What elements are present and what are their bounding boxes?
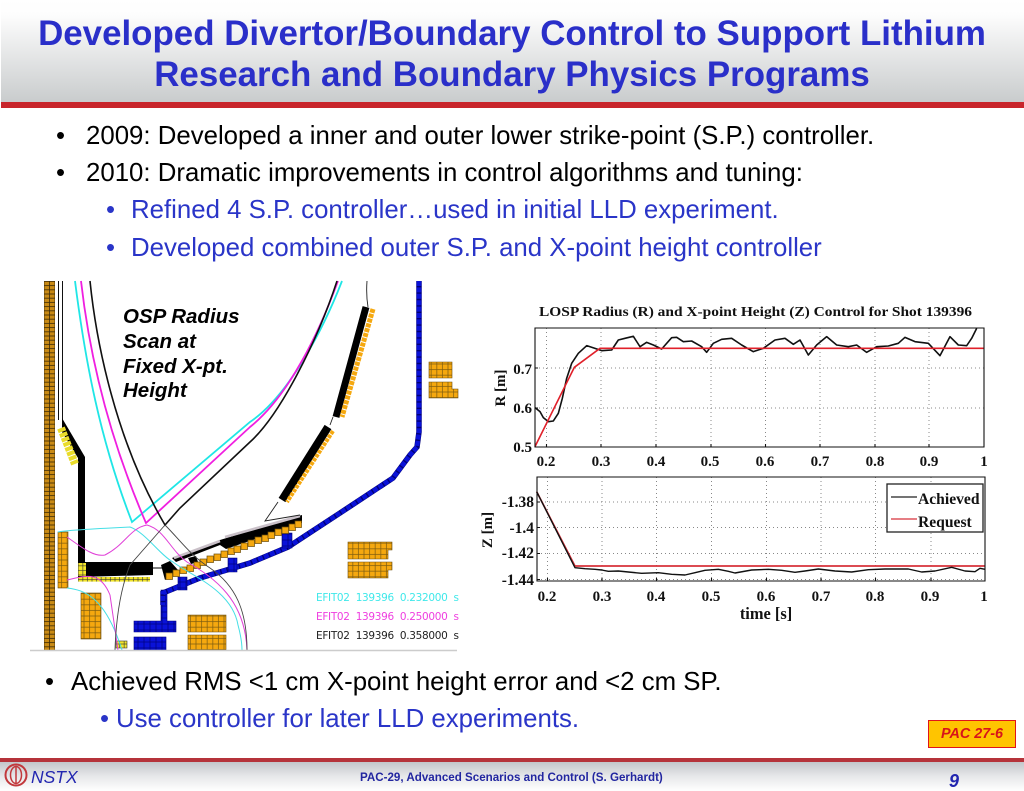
sub-bullet combined controller: [106, 234, 822, 262]
scrape-off leg black: [115, 525, 247, 650]
page number: 9: [949, 771, 959, 791]
annotation: OSP radius scan: Fixed X-pt.: [123, 355, 228, 378]
R x tick labels: 0.3: [592, 454, 610, 470]
bullet achieved RMS: [45, 668, 722, 696]
R y tick labels: [513, 362, 532, 456]
Z x tick labels: 0.7: [812, 589, 831, 605]
blue coil upper: [134, 590, 176, 632]
Z x tick labels: 0.5: [702, 589, 720, 605]
R chart achieved trace: [535, 328, 977, 422]
Z x tick labels: 0.9: [921, 589, 939, 605]
R y tick labels: 0.5: [513, 440, 532, 456]
Z axis label: Z [m]: [480, 512, 496, 548]
R x tick labels: 0.6: [756, 454, 775, 470]
Z x tick labels: 0.4: [647, 589, 666, 605]
Z x tick labels: 0.3: [593, 589, 611, 605]
mid outer orange tiles: [287, 431, 333, 502]
PF coil upper right: [429, 362, 458, 398]
R chart: [493, 328, 988, 470]
lower bullet list: Use controller for later LLD experiments.: [116, 705, 579, 733]
corner yellow tiles: [78, 563, 86, 576]
Z chart achieved trace: [537, 492, 985, 575]
sub-bullet refined controller: •: [106, 196, 115, 224]
separatrix magenta: [81, 281, 338, 523]
header red rule: [1, 102, 1024, 108]
time axis label: time [s]: [740, 604, 792, 623]
Z chart request trace: [537, 492, 985, 566]
image bottom edge: [30, 650, 457, 652]
title: Developed Divertor/Boundary Control to Support Lithium: [38, 14, 986, 53]
PF coil right mid: [348, 542, 392, 578]
bullet 2009: •: [56, 122, 65, 150]
inner divertor black plate: [62, 418, 153, 577]
Z y tick labels: -1.4: [509, 520, 534, 537]
R x tick labels: 0.8: [866, 454, 884, 470]
R x tick labels: 0.9: [920, 454, 938, 470]
R x tick labels: 0.4: [647, 454, 666, 470]
Z y tick labels: [502, 494, 534, 589]
Z y tick labels: -1.42: [502, 545, 534, 562]
R chart gridlines: [535, 328, 984, 447]
small yellow coil: [116, 641, 127, 648]
R y tick labels: 0.7: [513, 362, 532, 378]
annotation: OSP radius scan: Scan at: [123, 330, 196, 353]
upper outer black plate: [336, 307, 366, 417]
Z chart legend: Achieved: [918, 491, 980, 508]
vessel blue clusters: [178, 533, 292, 590]
separatrix cyan: [75, 281, 342, 522]
R chart request trace: [535, 348, 984, 447]
Z x tick labels: [538, 589, 988, 605]
sub-bullet refined controller: [106, 196, 779, 224]
R x tick labels: 0.5: [701, 454, 719, 470]
R y tick labels: 0.6: [513, 401, 532, 417]
connecting line: [153, 567, 162, 569]
legend EFIT cyan: EFIT02 139396 0.232000 s: [316, 592, 459, 604]
Z chart legend: Request: [918, 514, 973, 531]
inner yellow diagonal tiles: [61, 428, 75, 464]
scrape-off leg cyan: [58, 527, 242, 650]
NSTX wordmark: NSTX: [31, 767, 78, 787]
left PF coil column: [58, 532, 68, 588]
Z chart: [480, 477, 988, 623]
sub-bullet later LLD: [100, 705, 579, 733]
vacuum vessel blue line: [163, 281, 419, 605]
PF coil lower left: [81, 593, 101, 639]
annotation: OSP radius scan: OSP Radius: [123, 305, 240, 328]
legend EFIT black: EFIT02 139396 0.358000 s: [316, 630, 459, 642]
R x tick labels: [537, 454, 988, 470]
footer red rule: [0, 758, 1024, 762]
divertor black block: [161, 561, 178, 580]
R x tick labels: 0.7: [811, 454, 830, 470]
bullet 2009: [56, 122, 874, 150]
sub-bullet combined controller: •: [106, 234, 115, 262]
bullet 2010: •: [56, 159, 65, 187]
Z chart legend: [887, 484, 983, 532]
chart title: LOSP Radius (R) and X-point Height (Z) Control for Shot 139396: [539, 305, 972, 320]
vacuum vessel tile segments: [163, 281, 419, 605]
tag: PAC 27-6: [928, 720, 1016, 748]
tag: PAC 27-6: PAC 27-6: [941, 726, 1003, 742]
R x tick labels: 0.2: [537, 454, 555, 470]
separatrix black: [90, 281, 337, 525]
legend EFIT magenta: EFIT02 139396 0.250000 s: [316, 611, 459, 623]
footer band: [0, 758, 1024, 791]
top bullet list: 2010: Dramatic improvements in control algorithms and tuning:: [86, 159, 803, 187]
annotation: OSP radius scan: Height: [123, 379, 187, 402]
Z x tick labels: 0.6: [757, 589, 776, 605]
annotation: OSP radius scan: [123, 305, 240, 402]
Z x tick labels: 1: [980, 589, 988, 605]
top bullet list: [56, 122, 874, 262]
Z x tick labels: 0.8: [866, 589, 884, 605]
footer centre text: PAC-29, Advanced Scenarios and Control (S. Gerhardt): [360, 771, 663, 784]
Z x tick labels: 0.2: [538, 589, 556, 605]
inner thin wall lines: [58, 281, 62, 420]
equilibrium diagram group: [30, 281, 459, 650]
R axis label: R [m]: [493, 369, 509, 407]
R chart frame: [535, 328, 984, 447]
bullet achieved RMS: •: [45, 668, 54, 696]
header band: [1, 0, 1024, 108]
small black tile: [188, 556, 198, 564]
Z chart frame: [537, 477, 985, 581]
title: Research and Boundary Physics Programs: [154, 55, 870, 94]
scrape-off leg magenta: [67, 525, 247, 650]
Z y tick labels: -1.44: [502, 572, 534, 589]
sub-bullet later LLD: •: [100, 705, 109, 733]
top bullet list: Refined 4 S.P. controller…used in initial LLD experiment.: [131, 196, 779, 224]
top bullet list: 2009: Developed a inner and outer lower strike-point (S.P.) controller.: [86, 122, 874, 150]
mid outer black plate: [282, 427, 328, 500]
upper outer orange tiles: [342, 309, 373, 417]
top bullet list: Developed combined outer S.P. and X-point height controller: [131, 234, 822, 262]
lower yellow tile row: [78, 577, 150, 582]
secondary passive plate slab: [172, 515, 302, 562]
centre stack wall: [44, 281, 55, 650]
wall connecting lines: [265, 281, 368, 521]
lower bullet list: Achieved RMS <1 cm X-point height error and <2 cm SP.: [71, 668, 722, 696]
divertor orange tiles: [166, 521, 302, 580]
Z chart gridlines: [537, 477, 985, 581]
blue coil lower: [134, 637, 166, 650]
grey stripe on slab: [174, 516, 300, 558]
NSTX logo mark: [4, 764, 28, 786]
lower bullet list: [45, 668, 722, 733]
bullet 2010: [56, 159, 803, 187]
PF coil lower centre: [188, 615, 226, 650]
R x tick labels: 1: [980, 454, 988, 470]
Z y tick labels: -1.38: [502, 494, 534, 511]
title: [38, 14, 986, 94]
